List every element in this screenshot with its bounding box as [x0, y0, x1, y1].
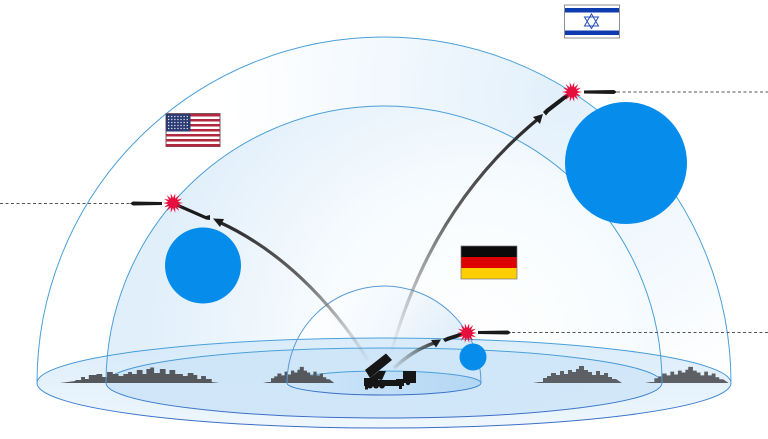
incoming missile: Israel [584, 90, 617, 94]
flag: Germany [461, 246, 517, 279]
outer ground disc [37, 338, 731, 428]
flag: USA [166, 114, 220, 146]
interceptor: Germany [443, 331, 467, 342]
inner dome [287, 286, 481, 383]
launcher vehicle [364, 354, 416, 390]
incoming missile: USA [130, 202, 162, 206]
skyline: centre right [533, 366, 622, 383]
outer dome outline [37, 37, 731, 383]
interceptor: USA [173, 202, 210, 220]
outer dome [37, 37, 731, 383]
interceptor trail to Israel engagement [392, 114, 543, 350]
interceptor trail to USA engagement [213, 218, 368, 360]
inner ground disc [287, 371, 481, 395]
skyline: far left [60, 368, 219, 383]
defended area circle: Germany [460, 344, 486, 370]
incoming missile: Germany [478, 330, 511, 334]
explosion: USA [163, 193, 183, 213]
skyline: centre left [263, 367, 334, 383]
inner dome outline [287, 286, 481, 383]
explosion: Israel [562, 82, 582, 102]
interceptor: Israel [543, 90, 574, 116]
middle dome outline [106, 106, 662, 383]
flag: Israel [564, 5, 620, 38]
explosion: Germany [457, 323, 477, 343]
middle dome [106, 106, 662, 383]
skyline: far right [645, 367, 729, 383]
interceptor trail to Germany engagement [394, 340, 441, 368]
defended area circle: Israel [565, 102, 687, 224]
dashed incoming track: right bottom [512, 332, 768, 334]
defended area circle: USA [165, 228, 241, 304]
middle ground disc [106, 348, 662, 418]
dashed incoming track: right top [617, 91, 768, 93]
dashed incoming track: left [0, 202, 130, 204]
